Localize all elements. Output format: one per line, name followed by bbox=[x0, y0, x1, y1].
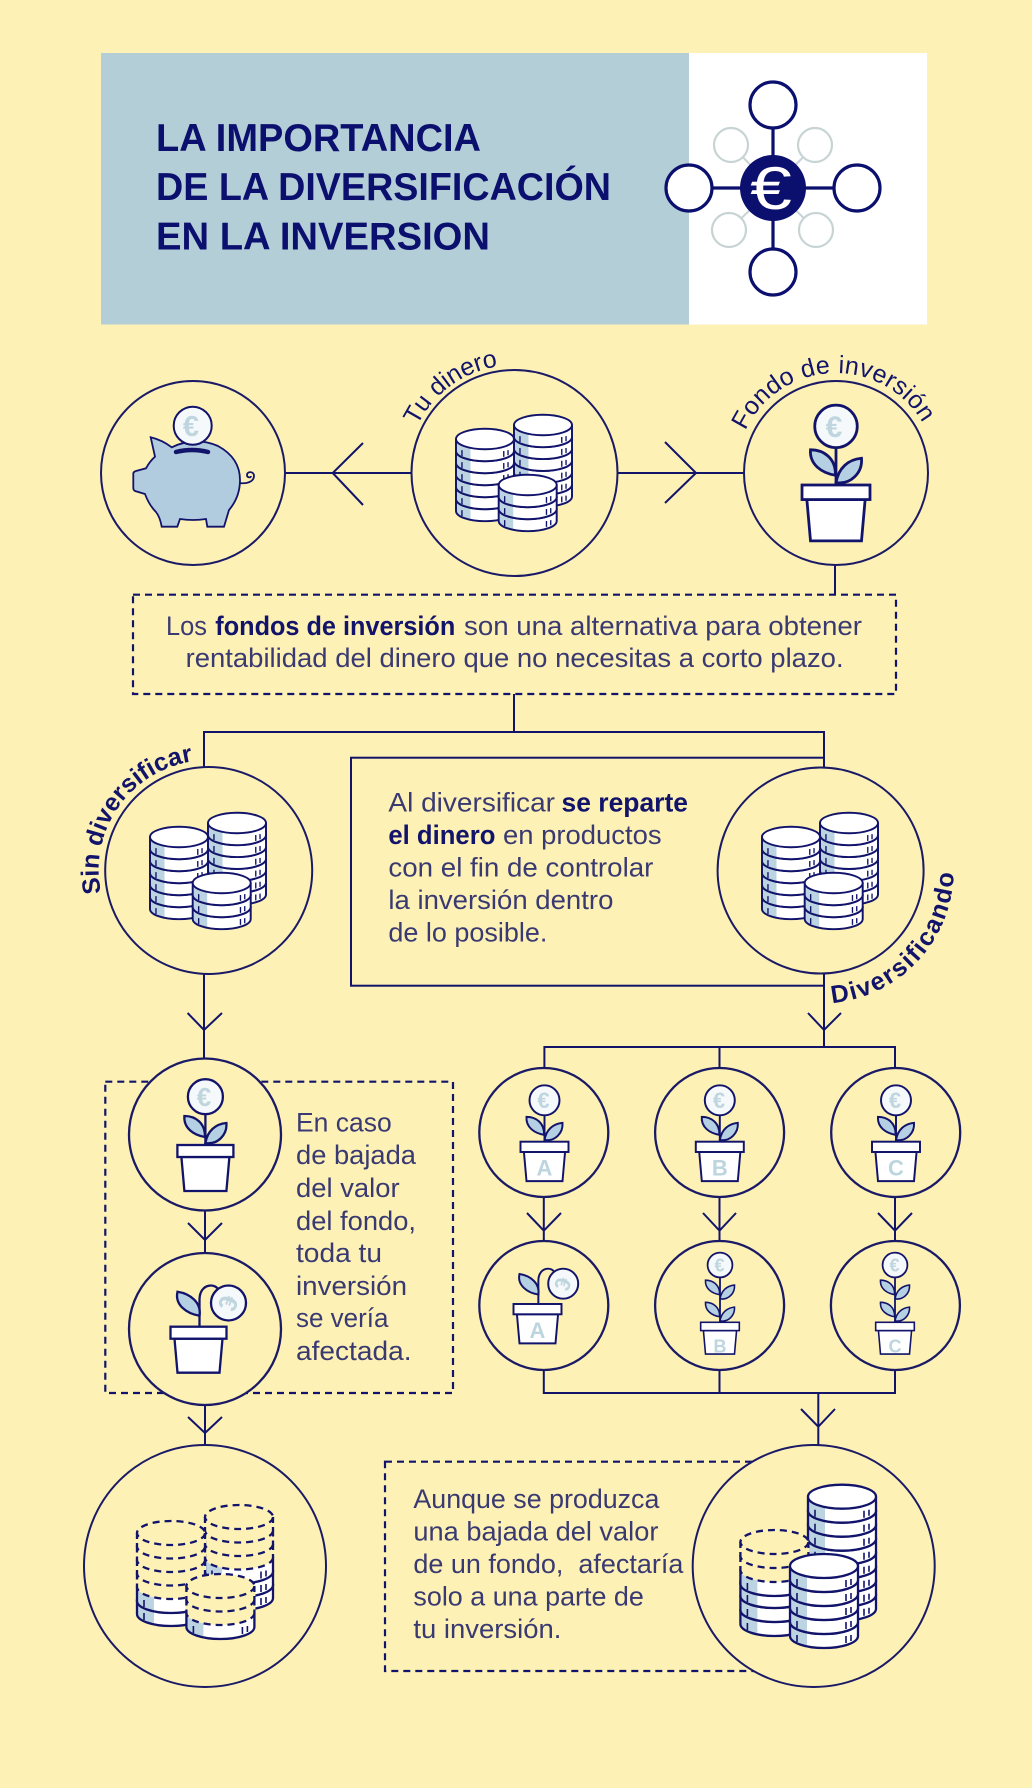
callout: investment funds: fondos de inversión bbox=[215, 611, 455, 641]
icon: tall plant C: € bbox=[889, 1256, 900, 1276]
icon: coin stacks bbox=[762, 813, 878, 929]
connectors: first row bbox=[285, 442, 835, 595]
icon: wilted plant: € bbox=[212, 1291, 245, 1315]
icon: wilted plant A bbox=[514, 1269, 578, 1343]
icon: wilted plant A: € bbox=[549, 1274, 577, 1294]
label: tu dinero: Tu dinero bbox=[402, 354, 496, 420]
callout: fall in value, dashed box: de bajada bbox=[296, 1140, 417, 1170]
callout: fall in value, dashed box: afectada. bbox=[296, 1336, 412, 1366]
icon: tall plant C: C bbox=[888, 1337, 902, 1357]
icon: plant B: € bbox=[713, 1088, 725, 1113]
panel: diversifying explanation bbox=[351, 758, 824, 986]
callout: fall in value, dashed box: se vería bbox=[296, 1303, 389, 1333]
icon: piggy bank bbox=[133, 407, 254, 527]
money circle: sin diversificar bbox=[105, 767, 312, 974]
icon: coin stacks bbox=[150, 813, 266, 929]
icon: plant A: A bbox=[537, 1156, 553, 1181]
icon: piggy bank: € bbox=[183, 411, 199, 443]
callout: fall in value, dashed box bbox=[105, 1082, 453, 1393]
plant circle A wilted bbox=[479, 1241, 608, 1370]
fund plant circle bbox=[744, 381, 928, 565]
header panel bbox=[101, 53, 927, 324]
callout: fall in value, dashed box: En caso bbox=[296, 1108, 392, 1138]
panel: diversifying explanation: Al diversificar bbox=[388, 788, 555, 818]
callout: fall in value, dashed box: inversión bbox=[296, 1271, 407, 1301]
icon: plant bbox=[177, 1079, 233, 1191]
title: EN LA INVERSION bbox=[156, 216, 490, 258]
icon: plant: € bbox=[197, 1082, 211, 1112]
title: DE LA DIVERSIFICACIÓN bbox=[156, 165, 611, 209]
piggy bank circle bbox=[101, 381, 285, 565]
icon: dashed coin stacks bbox=[136, 1505, 274, 1639]
panel: diversifying explanation: el dinero bbox=[388, 820, 495, 850]
icon: mixed coin stacks bbox=[739, 1485, 876, 1648]
callout: investment funds bbox=[133, 595, 896, 694]
icon: plant B bbox=[696, 1085, 744, 1181]
callout: partial effect, dashed box bbox=[385, 1462, 785, 1671]
callout: fall in value, dashed box: del valor bbox=[296, 1173, 400, 1203]
callout: investment funds: son una alternativa para obtener bbox=[464, 611, 862, 641]
callout: partial effect, dashed box: tu inversión. bbox=[413, 1614, 561, 1644]
connectors: branch bbox=[188, 694, 895, 1068]
icon: plant C bbox=[872, 1085, 920, 1181]
title: LA IMPORTANCIA bbox=[156, 117, 481, 160]
icon: wilted plant bbox=[170, 1286, 246, 1373]
plant circle B grown bbox=[655, 1241, 784, 1370]
plant circle A bbox=[479, 1068, 608, 1197]
money circle: tu dinero bbox=[412, 370, 618, 576]
icon: wilted plant A: A bbox=[530, 1318, 546, 1343]
callout: partial effect, dashed box: de un fondo, afectaría bbox=[413, 1549, 684, 1579]
panel: diversifying explanation: la inversión dentro bbox=[388, 885, 613, 915]
icon: euro network: € bbox=[750, 156, 792, 222]
plant circle: healthy fund bbox=[129, 1058, 281, 1210]
label: fondo de inversion: Fondo de inversión bbox=[731, 355, 932, 429]
icon: plant C: € bbox=[889, 1088, 901, 1113]
callout: fall in value, dashed box: toda tu bbox=[296, 1238, 382, 1268]
icon: tall plant B: B bbox=[714, 1337, 726, 1357]
icon: plant C: C bbox=[888, 1156, 904, 1181]
callout: investment funds: rentabilidad del dinero que no necesitas a corto plazo. bbox=[186, 643, 844, 673]
plant circle C bbox=[831, 1068, 960, 1197]
result circle: all affected bbox=[84, 1445, 326, 1687]
panel: diversifying explanation: se reparte bbox=[562, 788, 688, 818]
money circle: diversificando bbox=[718, 768, 924, 974]
callout: fall in value, dashed box: del fondo, bbox=[296, 1206, 416, 1236]
icon: tall plant C bbox=[876, 1253, 914, 1357]
callout: partial effect, dashed box: Aunque se produzca bbox=[413, 1484, 660, 1514]
icon: plant B: B bbox=[712, 1156, 728, 1181]
icon: plant with euro coin: € bbox=[826, 411, 843, 444]
icon: plant A: € bbox=[537, 1088, 550, 1113]
label: diversificando: Diversificando bbox=[831, 873, 954, 1004]
plant circle B bbox=[655, 1068, 784, 1197]
callout: partial effect, dashed box: solo a una parte de bbox=[413, 1582, 644, 1612]
icon: coin stacks bbox=[456, 415, 572, 531]
label: sin diversificar: Sin diversificar bbox=[80, 748, 191, 894]
panel: diversifying explanation: de lo posible. bbox=[388, 918, 547, 948]
icon: plant A bbox=[521, 1085, 568, 1181]
title bbox=[156, 117, 611, 258]
plant circle C grown bbox=[831, 1241, 960, 1370]
panel: diversifying explanation: con el fin de controlar bbox=[388, 853, 653, 883]
icon: tall plant B: € bbox=[714, 1256, 725, 1276]
panel: diversifying explanation: en productos bbox=[503, 820, 662, 850]
icon: plant with euro coin bbox=[802, 405, 870, 541]
icon: euro network bbox=[666, 82, 880, 295]
callout: partial effect, dashed box: una bajada del valor bbox=[413, 1517, 658, 1547]
icon: tall plant B bbox=[701, 1253, 739, 1357]
result circle: partly affected bbox=[693, 1445, 935, 1687]
connectors: lower arrows bbox=[188, 1197, 912, 1446]
plant circle: wilted fund bbox=[129, 1253, 281, 1405]
callout: investment funds: Los bbox=[166, 611, 207, 641]
